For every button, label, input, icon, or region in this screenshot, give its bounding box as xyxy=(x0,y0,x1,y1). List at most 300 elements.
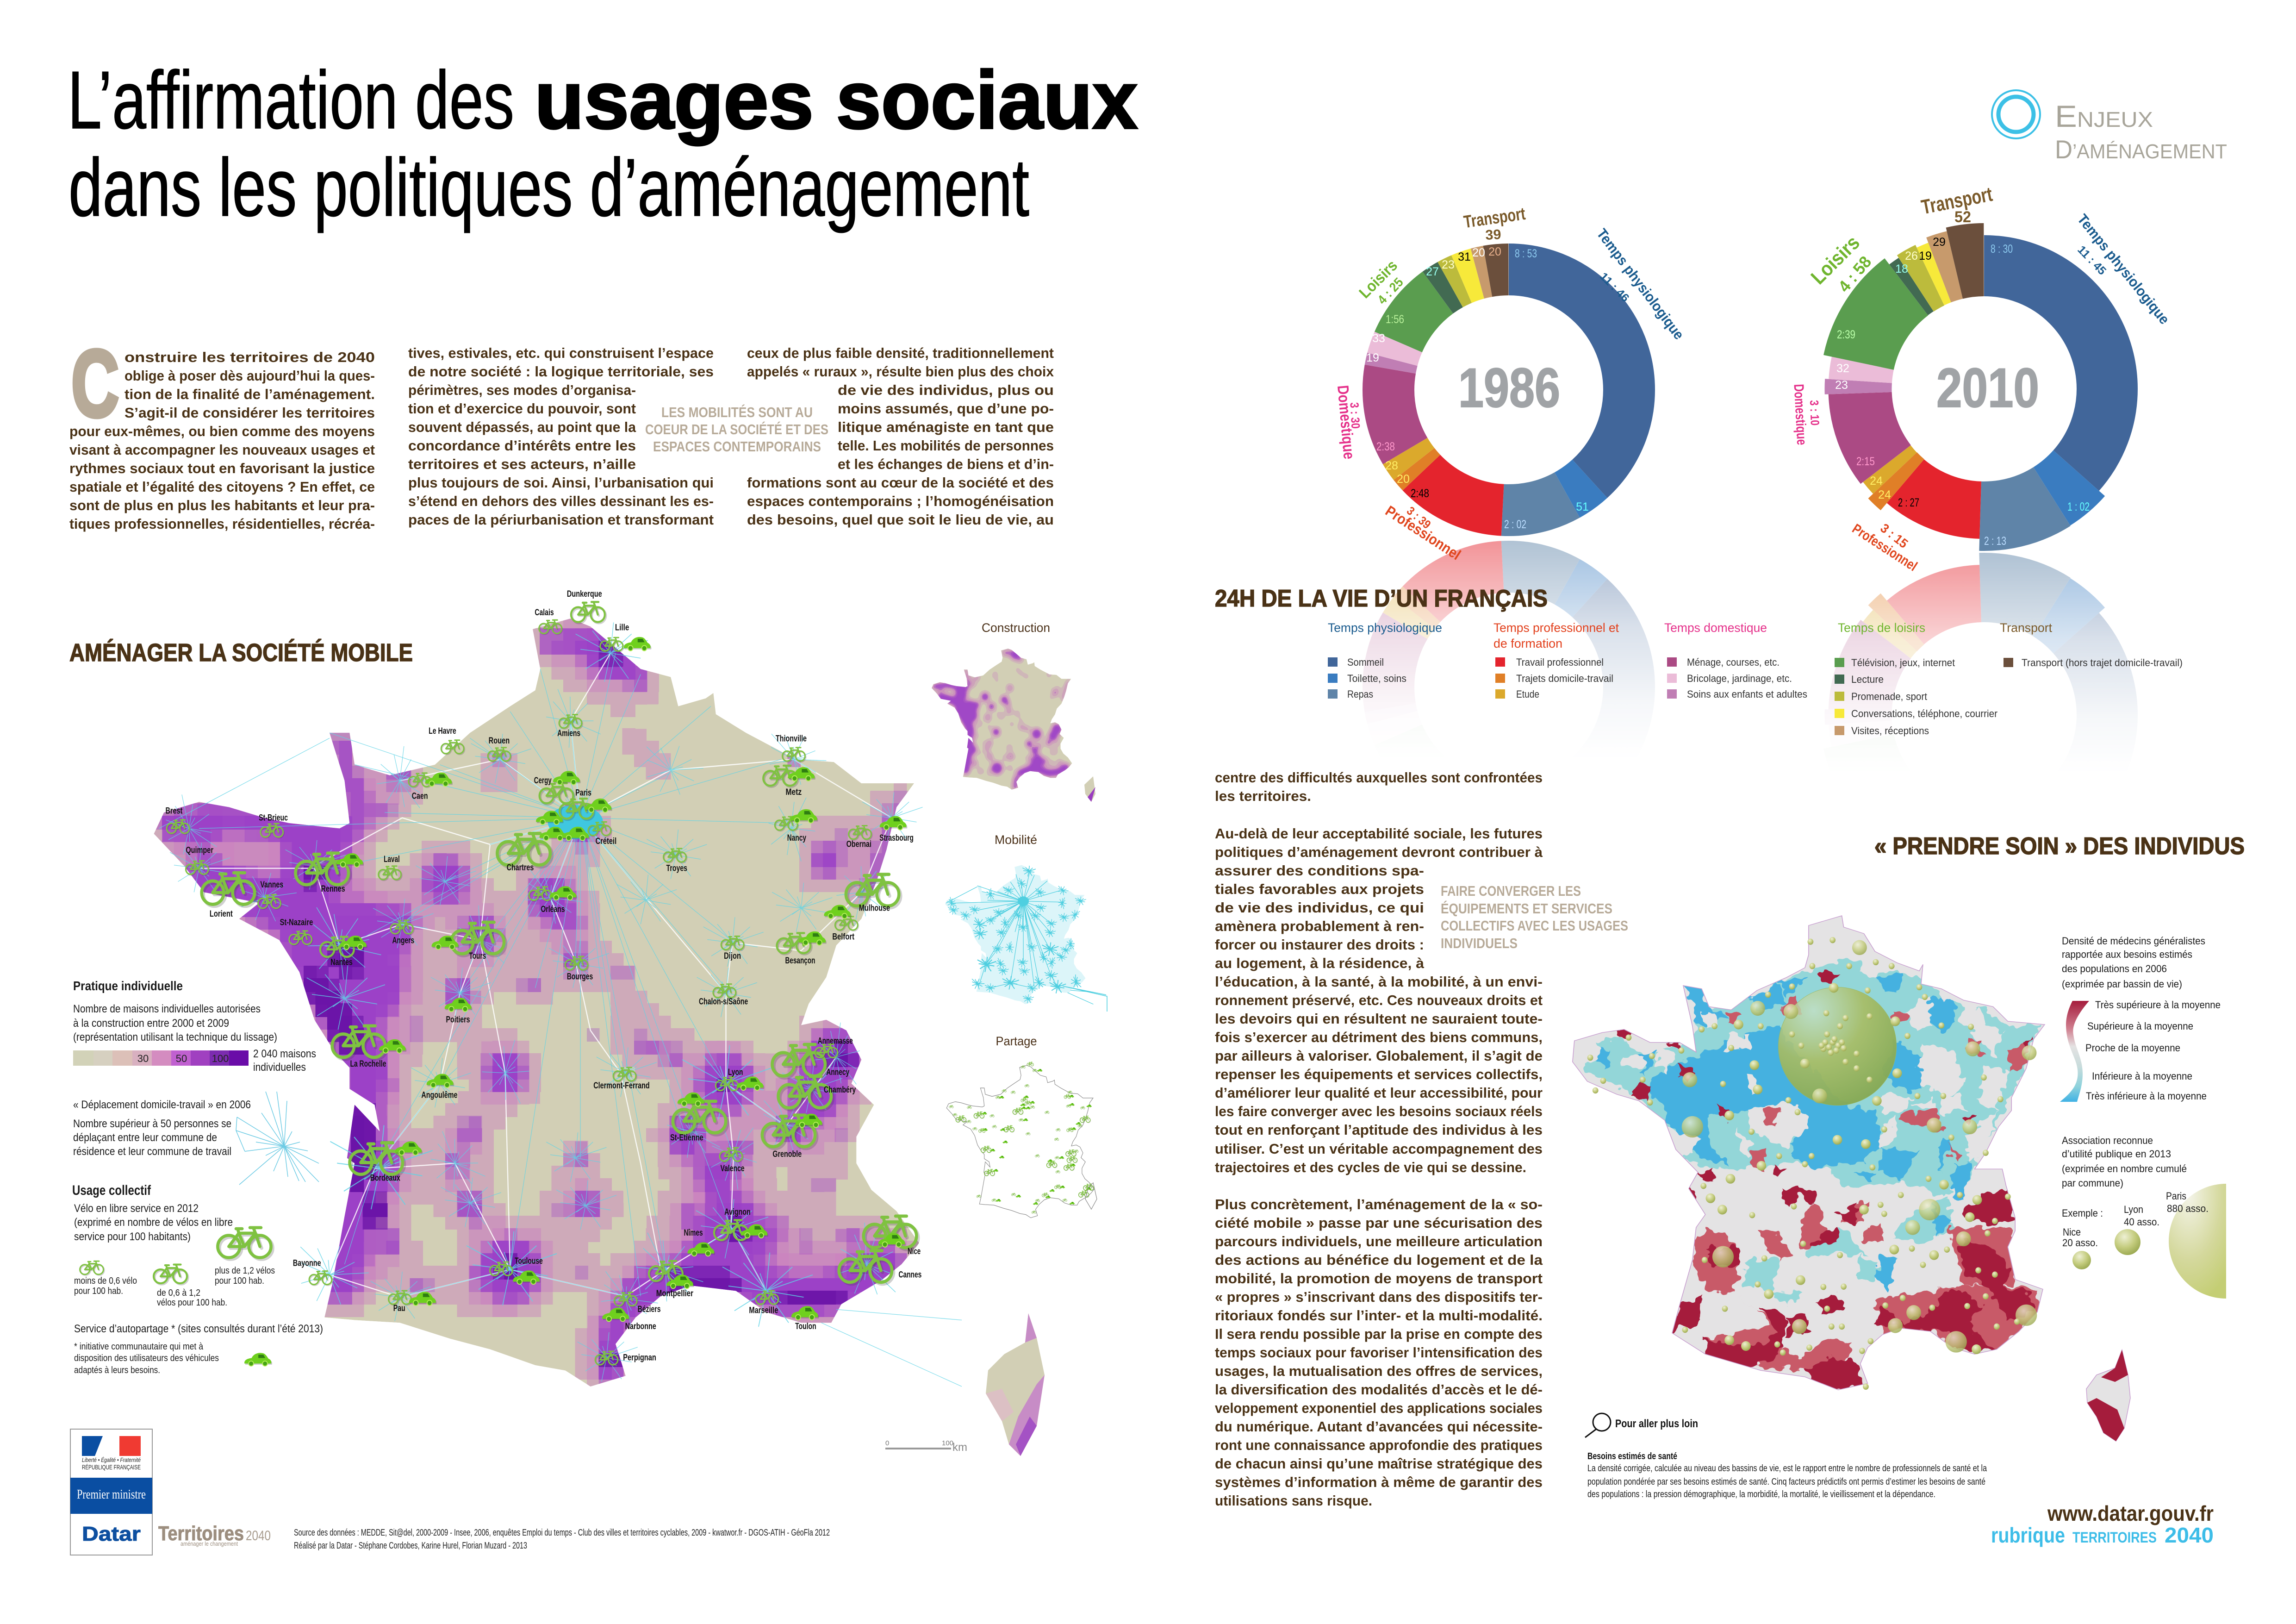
choropleth xyxy=(1573,916,2045,1390)
right column text: Plus concrètement, l’aménagement de la « so- xyxy=(1215,1196,1543,1212)
right column text: centre des difficultés auxquelles sont confrontées xyxy=(1215,769,1543,786)
donut chart 2010: 24 xyxy=(1878,488,1891,501)
association bubbles xyxy=(1587,937,2037,1390)
donut chart 2010 xyxy=(1835,236,2113,548)
donut chart 2010: 8 : 30 xyxy=(1991,243,2013,256)
city labels: Amiens xyxy=(557,728,580,738)
city labels: Bayonne xyxy=(293,1258,321,1268)
donut chart 2010: 19 xyxy=(1919,250,1932,262)
city labels: Toulouse xyxy=(515,1256,543,1266)
right column text: les faire converger avec les besoins sociaux réels xyxy=(1215,1103,1543,1119)
donut chart 1986: 51 xyxy=(1576,500,1589,513)
donut chart 1986: 20 xyxy=(1397,473,1410,486)
city labels: Créteil xyxy=(596,836,616,846)
legend: 24H: Toilette, soins xyxy=(1347,673,1406,684)
city labels: Annemasse xyxy=(818,1036,853,1046)
logos: RÉPUBLIQUE FRANÇAISE xyxy=(82,1463,141,1471)
city labels: Bourges xyxy=(567,972,593,982)
city labels: Avignon xyxy=(724,1207,751,1217)
donut labels 2010: 52 xyxy=(1954,208,1971,226)
donut chart 1986: 2:48 xyxy=(1411,487,1429,500)
legend: density: rapportée aux besoins estimés xyxy=(2062,949,2192,960)
city labels: Cergy xyxy=(534,776,552,786)
legend: usage collectif: disposition des utilisateurs des véhicules xyxy=(74,1353,219,1363)
donut labels 2010: Domestique xyxy=(1791,384,1809,445)
legend: associations: Association reconnue xyxy=(2062,1135,2153,1146)
legend: density: des populations en 2006 xyxy=(2062,963,2167,974)
donut chart 1986: 20 xyxy=(1472,246,1485,259)
legend: usage collectif: pour 100 hab. xyxy=(215,1276,264,1286)
donut labels 2010: 11 : 45 xyxy=(2075,243,2109,278)
legend: usage collectif xyxy=(72,1183,323,1375)
website link xyxy=(1991,1501,2214,1547)
donut chart 1986: 20 xyxy=(1488,245,1501,258)
map: prendre soin xyxy=(1573,916,2045,1390)
intro text: de notre société : la logique territoriale, ses xyxy=(408,363,714,380)
legend: usage collectif: adaptés à leurs besoins. xyxy=(74,1365,160,1375)
map: société mobile xyxy=(153,589,962,1387)
legend: associations: (exprimée en nombre cumulé xyxy=(2062,1163,2187,1174)
Lyon bubble xyxy=(2115,1229,2140,1255)
city labels: Mulhouse xyxy=(859,903,890,913)
city labels: Clermont-Ferrand xyxy=(593,1081,650,1091)
legend: déplacement domicile-travail: « Déplacement domicile-travail » en 2006 xyxy=(73,1099,251,1111)
city labels: Rennes xyxy=(321,884,345,894)
right column text: ciété mobile » passe par une sécurisation des xyxy=(1215,1215,1543,1231)
intro text: périmètres, ses modes d’organisa- xyxy=(408,382,636,398)
title xyxy=(68,54,1138,233)
right column text: parcours individuels, une meilleure articulation xyxy=(1215,1233,1543,1249)
legend: associations: d’utilité publique en 2013 xyxy=(2062,1148,2171,1160)
right column text: usages, la mutualisation des offres de services, xyxy=(1215,1363,1543,1379)
legend: usage collectif: Usage collectif xyxy=(72,1183,151,1198)
donut labels 2010: 4 : 58 xyxy=(1834,252,1875,296)
right column text: assurer des conditions spa- xyxy=(1215,862,1424,879)
colour scale: 50 xyxy=(176,1053,187,1064)
intro text: tiques professionnelles, résidentielles, récréa- xyxy=(69,516,375,532)
donut labels 2010 xyxy=(1791,183,2173,574)
city labels: Marseille xyxy=(749,1305,778,1316)
right column text: fois s’exercer au détriment des biens communs, xyxy=(1215,1029,1543,1045)
legend: 24H: Etude xyxy=(1516,688,1539,700)
donut labels 2010: 3 : 10 xyxy=(1807,400,1822,426)
legend: associations: par commune) xyxy=(2062,1177,2123,1189)
bike icon small xyxy=(80,1261,104,1275)
city labels: Strasbourg xyxy=(879,833,914,843)
right column text: tiales favorables aux projets xyxy=(1215,881,1424,897)
city labels: Valence xyxy=(721,1164,745,1174)
donut chart 1986: 28 xyxy=(1385,459,1398,472)
right column text: mobilité, la promotion de moyens de transport xyxy=(1215,1270,1543,1287)
further reading: des populations : la pression démographique, la morbidité, la mortalité, le vieillissement et la dépendance. xyxy=(1587,1489,1935,1499)
further reading: Besoins estimés de santé xyxy=(1587,1451,1677,1462)
sources xyxy=(294,1528,830,1551)
Paris bubble xyxy=(2169,1184,2226,1299)
donut labels 2010: Transport xyxy=(1919,183,1994,219)
donut chart 1986: 27 xyxy=(1426,265,1439,278)
intro text: ceux de plus faible densité, traditionnellement xyxy=(747,345,1054,361)
right column text: utilisations sans risque. xyxy=(1215,1493,1372,1509)
legend: usage collectif: vélos pour 100 hab. xyxy=(157,1298,227,1308)
small map: mobilité: Mobilité xyxy=(995,833,1037,847)
legend: associations: Paris xyxy=(2166,1190,2186,1202)
intro text: paces de la périurbanisation et transformant xyxy=(408,512,714,528)
logos: 2040 xyxy=(246,1528,271,1543)
legend: density: Très supérieure à la moyenne xyxy=(2095,999,2221,1011)
right column text: amènera probablement à ren- xyxy=(1215,918,1424,934)
heading: aménager: AMÉNAGER LA SOCIÉTÉ MOBILE xyxy=(69,639,413,667)
donut chart 2010: 24 xyxy=(1870,475,1883,487)
legend: déplacement domicile-travail xyxy=(73,1092,319,1185)
city labels: St-Etienne xyxy=(670,1133,703,1143)
donut chart 1986: 1986 xyxy=(1458,357,1560,419)
website link: 2040 xyxy=(2165,1523,2214,1547)
further reading: population pondérée par ses besoins estimés de santé. Cinq facteurs prédictifs ont permis d’estimer les besoins de santé xyxy=(1587,1477,1985,1487)
legend: 24H xyxy=(1328,621,2183,737)
donut labels 2010: Temps physiologique xyxy=(2074,211,2173,327)
legend: 24H: Bricolage, jardinage, etc. xyxy=(1687,673,1792,684)
legend: pratique individuelle: 2 040 maisons xyxy=(253,1048,316,1060)
legend: associations: Exemple : xyxy=(2062,1207,2103,1219)
donut chart 1986: 31 xyxy=(1458,250,1471,263)
intro text: S’agit-il de considérer les territoires xyxy=(124,405,375,421)
intro text: et les échanges de biens et d’in- xyxy=(838,456,1054,472)
legend: 24H: Repas xyxy=(1347,688,1373,700)
city labels: Nîmes xyxy=(684,1228,703,1238)
right column text: temps sociaux pour favoriser l’intensification des xyxy=(1215,1344,1543,1361)
intro text: plus toujours de soi. Ainsi, l’urbanisation qui xyxy=(408,475,714,491)
right column text: la diversification des modalités d’accès et le dé- xyxy=(1215,1381,1543,1398)
right column text: d’améliorer leur qualité et leur accessibilité, pour xyxy=(1215,1085,1543,1101)
right column text: ritoriaux fondés sur l’inter- et la multi-modalité. xyxy=(1215,1307,1543,1324)
legend: density: Supérieure à la moyenne xyxy=(2087,1020,2193,1032)
legend: 24H: Transport (hors trajet domicile-travail) xyxy=(2022,657,2183,668)
donut labels 1986: 3 : 30 xyxy=(1348,402,1363,429)
legend: 24H: Trajets domicile-travail xyxy=(1516,673,1613,684)
city labels: Brest xyxy=(165,806,183,816)
donut chart 2010: 29 xyxy=(1933,236,1946,249)
small map: construction: Construction xyxy=(982,621,1050,635)
city labels: Nancy xyxy=(787,833,806,843)
city labels: St-Nazaire xyxy=(280,918,313,928)
donut labels 2010: 3 : 15 xyxy=(1878,521,1910,551)
France base with housing density xyxy=(154,618,919,1387)
right column text: systèmes d’information à même de garantir des xyxy=(1215,1474,1543,1490)
pull quote: converger: INDIVIDUELS xyxy=(1441,935,1518,951)
legend: usage collectif: de 0,6 à 1,2 xyxy=(157,1288,200,1298)
donut labels 2010: Loisirs xyxy=(1807,231,1864,289)
donut labels 1986: Temps physiologique xyxy=(1593,225,1687,343)
intro text: onstruire les territoires de 2040 xyxy=(124,349,375,365)
legend: déplacement domicile-travail: Nombre supérieur à 50 personnes se xyxy=(73,1118,231,1130)
logos: aménager le changement xyxy=(180,1540,238,1547)
city labels: Thionville xyxy=(776,734,807,743)
legend: usage collectif: service pour 100 habitants) xyxy=(74,1230,191,1243)
right column text: Il sera rendu possible par la prise en compte des xyxy=(1215,1326,1543,1342)
city labels: Orléans xyxy=(541,904,565,914)
city labels: Montpellier xyxy=(656,1288,694,1299)
drop cap: C xyxy=(71,331,119,437)
legend: usage collectif: moins de 0,6 vélo xyxy=(74,1276,137,1286)
further reading: Pour aller plus loin xyxy=(1615,1418,1698,1430)
heading: 24H: 24H DE LA VIE D’UN FRANÇAIS xyxy=(1215,585,1548,612)
intro text: tion et d’exercice du pouvoir, sont xyxy=(408,400,636,417)
city labels: Annecy xyxy=(826,1068,850,1077)
city labels: Béziers xyxy=(638,1305,661,1314)
Paris hub xyxy=(548,805,603,839)
donut chart 1986: 19 xyxy=(1366,351,1379,364)
right column text: utiliser. C’est un véritable accompagnement des xyxy=(1215,1141,1543,1157)
logo: Enjeux d'aménagement: ENJEUX xyxy=(2055,99,2153,133)
bike icon medium xyxy=(154,1265,188,1284)
right column text: ront une connaissance approfondie des pratiques xyxy=(1215,1437,1543,1453)
pull quote: mobilités xyxy=(645,404,828,455)
small map: partage: Partage xyxy=(996,1034,1037,1048)
intro text: pour eux-mêmes, ou bien comme des moyens xyxy=(69,423,375,439)
right column text: du numérique. Autant d’avancées qui nécessite- xyxy=(1215,1418,1543,1435)
legend: pratique individuelle: Pratique individuelle xyxy=(73,979,183,993)
right column text xyxy=(1215,769,1543,1509)
intro text: litique aménagiste en tant que xyxy=(838,419,1054,435)
city labels: Perpignan xyxy=(623,1353,656,1363)
S-shaped colour scale xyxy=(2060,1001,2089,1102)
intro text xyxy=(69,331,1054,532)
legend: 24H: de formation xyxy=(1493,637,1562,650)
legend: usage collectif: (exprimé en nombre de vélos en libre xyxy=(74,1216,233,1229)
legend: 24H: Promenade, sport xyxy=(1851,691,1927,702)
legend: déplacement domicile-travail: déplaçant entre leur commune de xyxy=(73,1131,217,1144)
donut reflections xyxy=(1388,567,2113,844)
intro text: tives, estivales, etc. qui construisent l’espace xyxy=(408,345,714,361)
intro text: des besoins, quel que soit le lieu de vie, au xyxy=(747,512,1054,528)
legend: associations: 880 asso. xyxy=(2167,1203,2209,1214)
colour scale: 30 xyxy=(137,1053,149,1064)
legend: associations xyxy=(2062,1135,2226,1299)
city labels: Obernai xyxy=(846,839,871,849)
website link: www.datar.gouv.fr xyxy=(2047,1501,2214,1525)
small map: construction xyxy=(932,621,1095,802)
city labels: Chartres xyxy=(507,863,534,873)
city labels: Nice xyxy=(908,1247,921,1256)
right column text: forcer ou instaurer des droits : xyxy=(1215,937,1424,953)
right column text: repenser les équipements et services collectifs, xyxy=(1215,1066,1543,1082)
legend: 24H: Ménage, courses, etc. xyxy=(1687,656,1780,668)
colour scale xyxy=(73,1050,249,1066)
legend: 24H: Lecture xyxy=(1851,674,1884,685)
intro text: concordance d’intérêts entre les xyxy=(408,437,636,454)
legend: 24H: Sommeil xyxy=(1347,656,1384,668)
Corsica (main map) xyxy=(986,1313,1045,1456)
legend: pratique individuelle: (représentation utilisant la technique du lissage) xyxy=(73,1031,277,1043)
legend: density: Très inférieure à la moyenne xyxy=(2086,1090,2207,1102)
title: dans les politiques d’aménagement xyxy=(68,142,1029,233)
right column text: de chacun ainsi qu’une maîtrise stratégique des xyxy=(1215,1455,1543,1472)
right column text: des actions au bénéfice du logement et de la xyxy=(1215,1252,1543,1268)
intro text: formations sont au cœur de la société et des xyxy=(747,475,1054,491)
legend: 24H: Temps professionnel et xyxy=(1493,621,1619,635)
intro text: moins assumés, que d’une po- xyxy=(838,400,1054,417)
legend: associations: Nice xyxy=(2063,1226,2081,1238)
website link: TERRITOIRES xyxy=(2072,1529,2157,1546)
logo: Enjeux d'aménagement: D’AMÉNAGEMENT xyxy=(2055,135,2227,164)
car icon xyxy=(244,1353,272,1366)
donut chart 2010: 2010 xyxy=(1936,357,2039,419)
small map: mobilité xyxy=(945,833,1107,1012)
city labels: Angers xyxy=(392,936,414,946)
logos: Territoires xyxy=(158,1522,244,1545)
donut labels 1986: 39 xyxy=(1485,227,1501,243)
city labels: Vannes xyxy=(260,880,283,890)
right column text: l’éducation, à la santé, à la mobilité, à un envi- xyxy=(1215,974,1543,990)
intro text: tion de la finalité de l’aménagement. xyxy=(124,386,375,402)
city labels: Le Havre xyxy=(429,726,456,736)
pull quote: mobilités: COEUR DE LA SOCIÉTÉ ET DES xyxy=(645,421,828,437)
city labels: Grenoble xyxy=(772,1149,802,1159)
city labels: Nantes xyxy=(330,957,353,968)
sources: Source des données : MEDDE, Sit@del, 2000-2009 - Insee, 2006, enquêtes Emploi du temps - Club des villes et territoires cyclables, 2009 - kwatwor.fr - DGOS-ATIH - GéoFla 2012 xyxy=(294,1528,830,1538)
intro text: appelés « ruraux », résulte bien plus des choix xyxy=(747,363,1054,380)
donut chart 1986: 23 xyxy=(1442,258,1455,271)
bike icon large xyxy=(218,1228,273,1259)
city labels: Toulon xyxy=(795,1322,816,1331)
city labels: Narbonne xyxy=(625,1322,656,1331)
logos: Liberté • Égalité • Fraternité xyxy=(82,1456,141,1463)
donut chart 2010: 26 xyxy=(1905,250,1918,262)
donut labels 1986: 4 : 25 xyxy=(1375,275,1406,307)
right column text: de vie des individus, ce qui xyxy=(1215,899,1424,916)
colour scale: 100 xyxy=(212,1053,229,1064)
legend: 24H: Télévision, jeux, internet xyxy=(1851,657,1955,668)
title: usages sociaux xyxy=(535,54,1138,146)
pull quote: converger: COLLECTIFS AVEC LES USAGES xyxy=(1441,918,1628,934)
heading: prendre soin: « PRENDRE SOIN » DES INDIVIDUS xyxy=(1874,833,2245,860)
city labels: Troyes xyxy=(666,863,687,874)
legend: 24H: Temps de loisirs xyxy=(1838,621,1925,635)
city labels: St-Brieuc xyxy=(259,813,288,823)
right column text: veloppement exponentiel des applications sociales xyxy=(1215,1400,1543,1416)
city labels: Paris xyxy=(575,788,591,798)
right column text: politiques d’aménagement devront contribuer à xyxy=(1215,844,1543,860)
city labels: Metz xyxy=(786,787,802,797)
city labels: Dunkerque xyxy=(567,589,602,599)
right column text: les devoirs qui en résultent ne sauraient toute- xyxy=(1215,1011,1543,1027)
donut chart 1986: 1:56 xyxy=(1386,313,1404,326)
intro text: territoires et ses acteurs, n’aille xyxy=(408,456,636,472)
scale bar: km xyxy=(952,1441,967,1454)
icon: commute star xyxy=(236,1092,319,1185)
scale bar: 100 xyxy=(942,1439,953,1447)
legend: usage collectif: Service d’autopartage * (sites consultés durant l’été 2013) xyxy=(74,1323,323,1335)
pull quote: converger: ÉQUIPEMENTS ET SERVICES xyxy=(1441,900,1612,917)
pull quote: mobilités: LES MOBILITÉS SONT AU xyxy=(661,404,813,420)
Nice bubble xyxy=(2072,1251,2091,1269)
city labels: Cannes xyxy=(898,1270,921,1280)
right column text: trajectoires et des cycles de vie qui se dessine. xyxy=(1215,1159,1526,1175)
commuter network xyxy=(153,623,962,1387)
intro text: souvent dépassés, au point que la xyxy=(408,419,636,435)
city labels: Chambéry xyxy=(824,1085,856,1095)
city labels: Rouen xyxy=(489,736,510,746)
city labels: Lyon xyxy=(728,1068,743,1077)
intro text: visant à accompagner les nouveaux usages et xyxy=(69,442,375,458)
logos: Datar xyxy=(82,1523,141,1545)
intro text: de vie des individus, plus ou xyxy=(838,382,1054,398)
donut chart 2010: 23 xyxy=(1835,379,1848,392)
donut chart 2010: 2:15 xyxy=(1856,455,1875,468)
legend: 24H: Soins aux enfants et adultes xyxy=(1687,688,1807,700)
scale bar xyxy=(885,1439,967,1454)
donut chart 1986: 8 : 53 xyxy=(1515,247,1537,260)
donut chart 1986 xyxy=(1366,245,1629,531)
legend: associations: Lyon xyxy=(2124,1204,2143,1215)
city labels: Pau xyxy=(393,1303,405,1313)
legend: density: Inférieure à la moyenne xyxy=(2092,1070,2192,1082)
city labels: Lille xyxy=(615,623,629,632)
pull quote: converger xyxy=(1441,883,1628,951)
donut chart 2010: 1 : 02 xyxy=(2067,500,2090,513)
intro text: rythmes sociaux tout en favorisant la justice xyxy=(69,460,375,476)
right column text: Au-delà de leur acceptabilité sociale, les futures xyxy=(1215,825,1543,842)
legend: pratique individuelle: individuelles xyxy=(253,1061,306,1074)
city labels: Angoulême xyxy=(421,1090,457,1100)
legend: density: Proche de la moyenne xyxy=(2085,1042,2180,1054)
city labels: Chalon-s/Saône xyxy=(699,997,748,1007)
city labels: Besançon xyxy=(785,956,815,966)
intro text: s’étend en dehors des villes dessinant les es- xyxy=(408,493,714,509)
donut labels 1986: 11 : 46 xyxy=(1597,270,1631,305)
logos: Premier ministre xyxy=(77,1487,146,1502)
sources: Réalisé par la Datar - Stéphane Cordobes, Karine Hurel, Florian Muzard - 2013 xyxy=(294,1541,527,1551)
scale bar: 0 xyxy=(885,1439,889,1447)
donut chart 2010: 2 : 13 xyxy=(1984,535,2006,548)
white roads xyxy=(199,653,891,1297)
legend: usage collectif: plus de 1,2 vélos xyxy=(215,1266,275,1276)
intro text: spatiale et l’égalité des citoyens ? En effet, ce xyxy=(69,479,375,495)
city labels: Caen xyxy=(412,791,428,801)
city labels: La Rochelle xyxy=(350,1059,386,1069)
pull quote: converger: FAIRE CONVERGER LES xyxy=(1441,883,1581,899)
legend: usage collectif: Vélo en libre service en 2012 xyxy=(74,1202,199,1215)
right column text: les territoires. xyxy=(1215,788,1311,804)
donut chart 1986: 2 : 02 xyxy=(1504,518,1526,531)
legend: 24H: Travail professionnel xyxy=(1516,656,1604,668)
legend: usage collectif: * initiative communautaire qui met à xyxy=(74,1342,204,1352)
donut labels 1986: Domestique xyxy=(1334,385,1358,460)
legend: density: (exprimée par bassin de vie) xyxy=(2062,978,2182,990)
right column text: tout en renforçant l’aptitude des individus à les xyxy=(1215,1122,1543,1138)
pull quote: mobilités: ESPACES CONTEMPORAINS xyxy=(653,438,821,455)
Paris big bubble xyxy=(1779,987,1897,1106)
legend: 24H: Conversations, téléphone, courrier xyxy=(1851,708,1997,719)
city labels: Tours xyxy=(469,951,486,961)
donut labels 1986 xyxy=(1334,204,1687,563)
city labels: Calais xyxy=(535,608,554,618)
legend: density: Densité de médecins généralistes xyxy=(2062,935,2205,947)
outline xyxy=(1573,916,2045,1390)
bike and car icons xyxy=(167,602,918,1366)
legend: density xyxy=(2060,935,2221,1102)
legend: pratique individuelle: à la construction entre 2000 et 2009 xyxy=(73,1017,229,1030)
city labels: Bordeaux xyxy=(370,1173,400,1183)
city labels: Poitiers xyxy=(446,1015,470,1025)
city labels: Lorient xyxy=(210,909,233,919)
right column text: ronnement préservé, etc. Ces nouveaux droits et xyxy=(1215,992,1543,1008)
legend: déplacement domicile-travail: résidence et leur commune de travail xyxy=(73,1145,231,1158)
right column text: au logement, à la résidence, à xyxy=(1215,955,1425,971)
further reading xyxy=(1585,1413,1987,1499)
legend: associations: 20 asso. xyxy=(2062,1237,2098,1249)
logo: Enjeux d'aménagement xyxy=(1992,90,2227,164)
